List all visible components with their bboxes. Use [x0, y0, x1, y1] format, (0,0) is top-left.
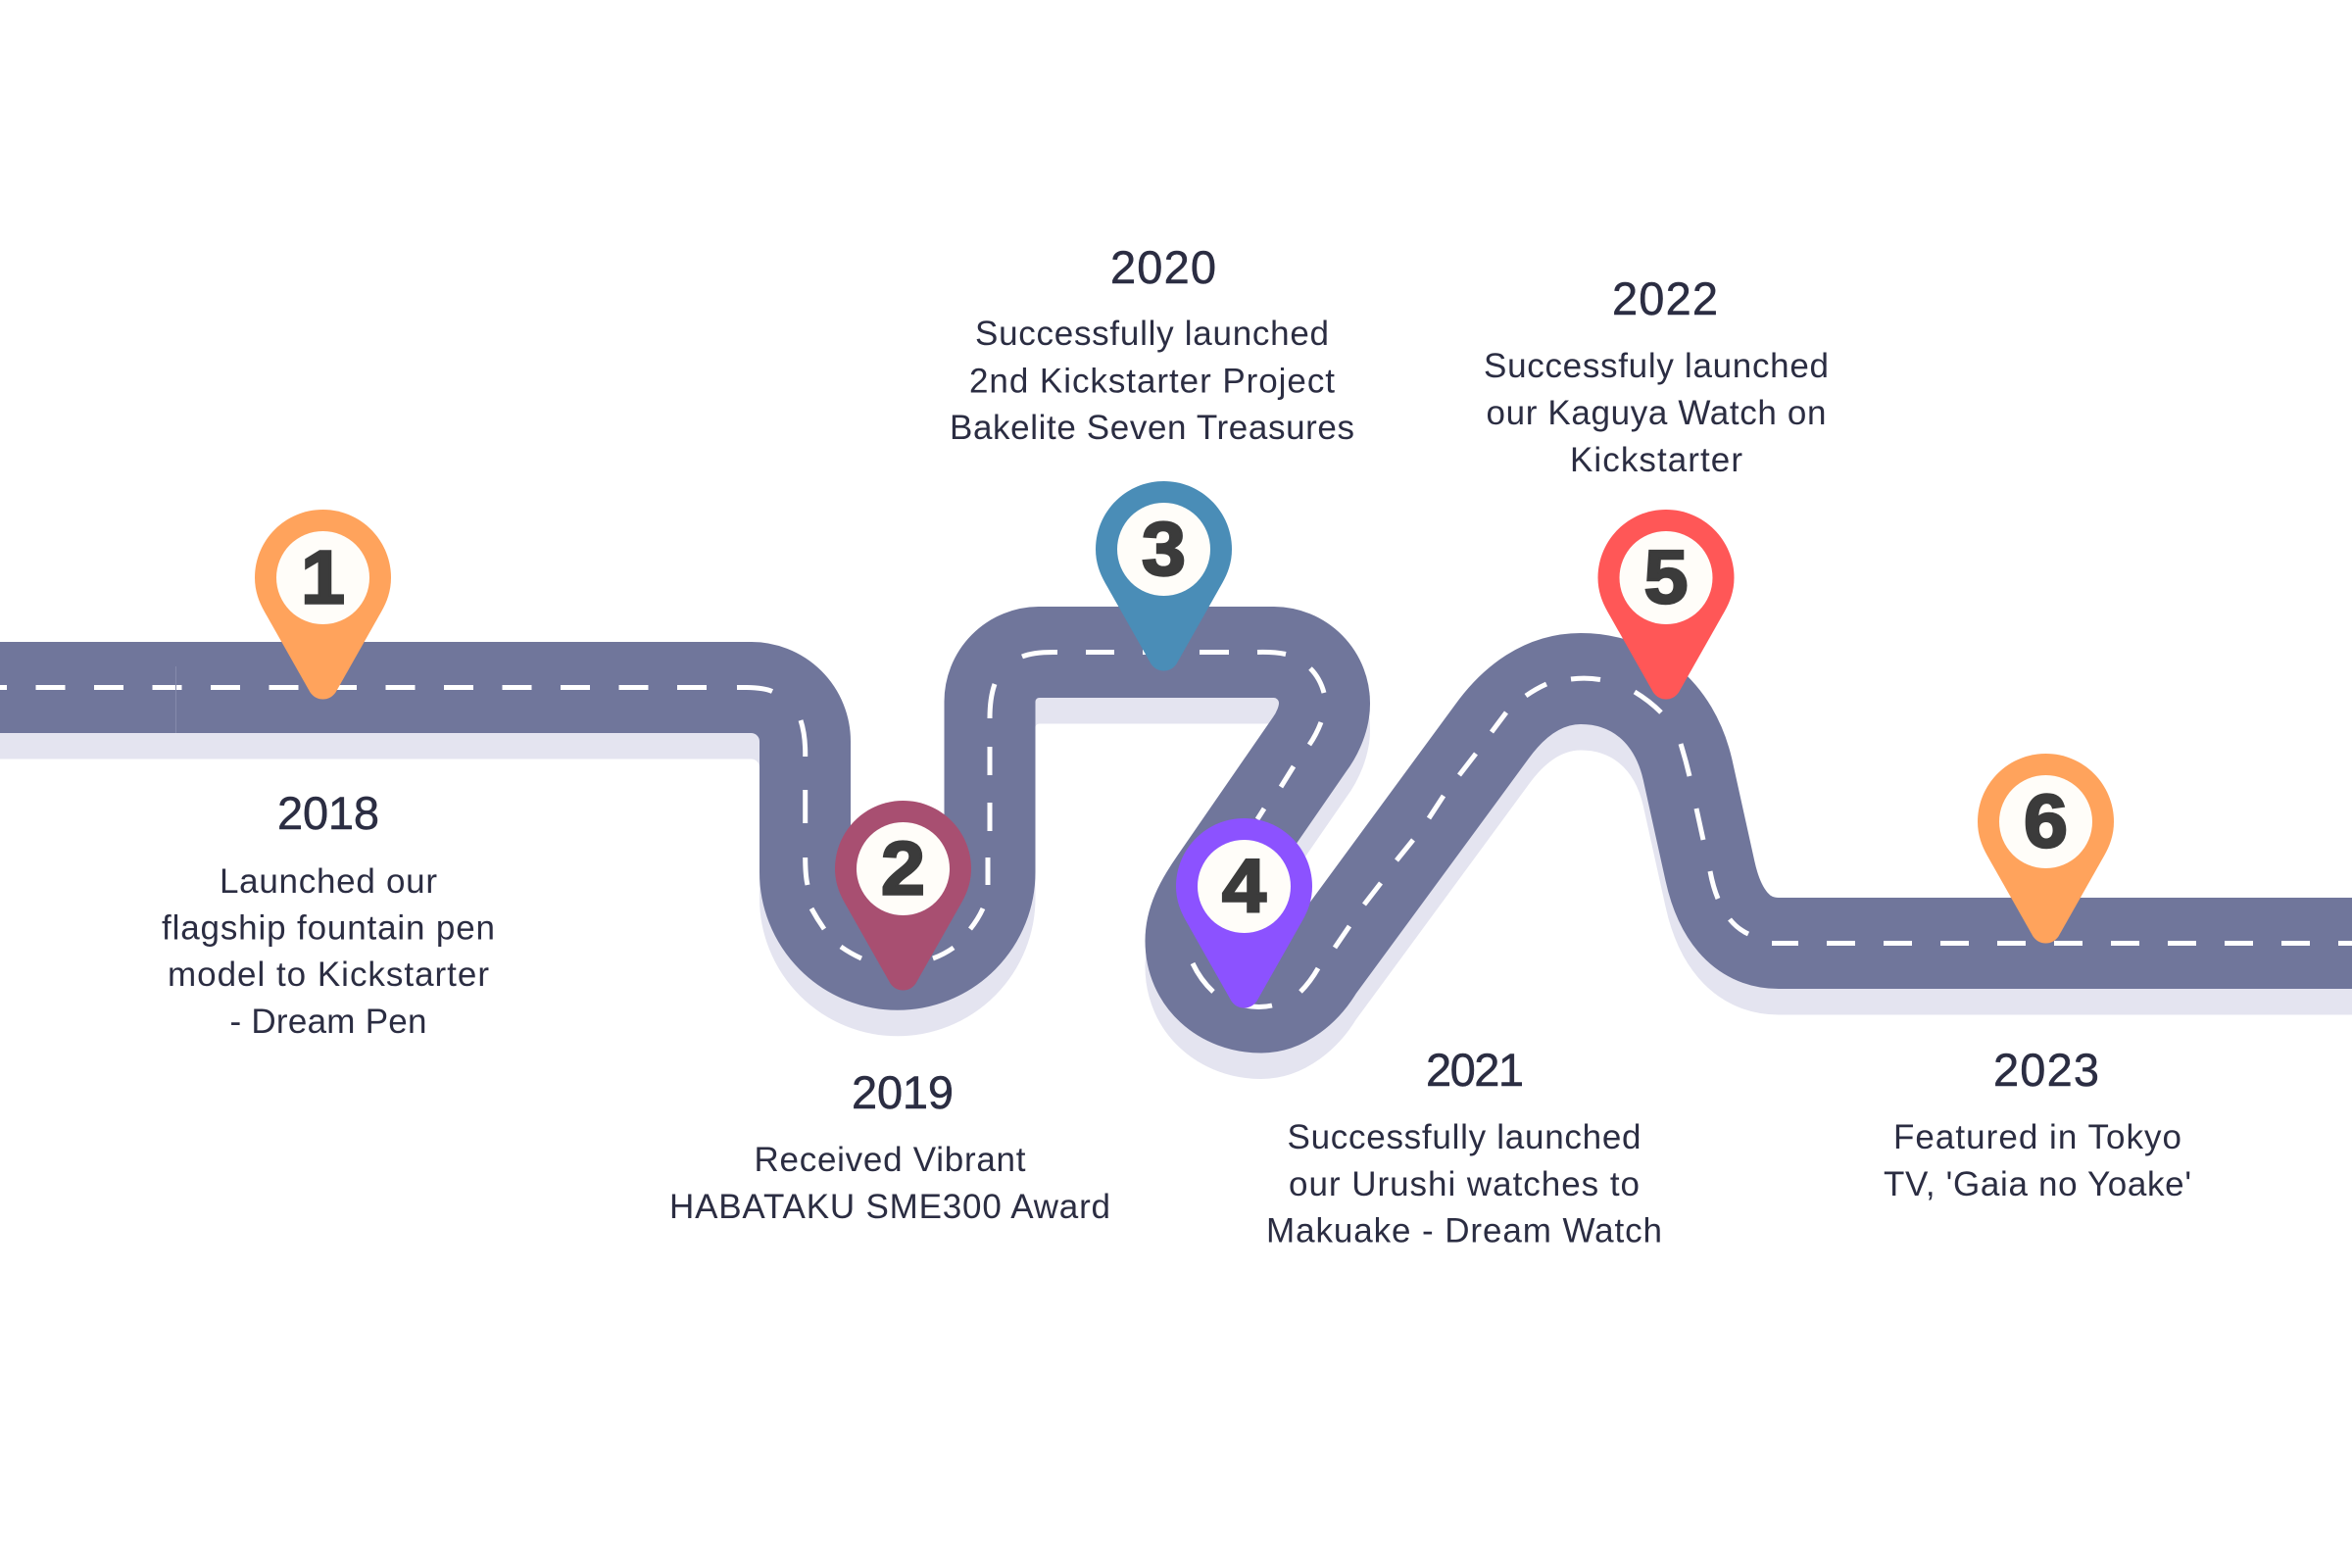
description 2018: flagship fountain pen	[162, 909, 495, 947]
description 2019: Received Vibrant	[755, 1141, 1026, 1179]
description 2018	[162, 862, 495, 1041]
description 2019	[669, 1141, 1110, 1226]
year 2020: 2020	[1110, 241, 1216, 293]
pin 2: 2	[881, 826, 925, 910]
milestone 6: 2023	[1884, 754, 2191, 1203]
description 2020: Bakelite Seven Treasures	[950, 409, 1354, 447]
description 2023: TV, 'Gaia no Yoake'	[1884, 1165, 2191, 1203]
pin 5: 5	[1644, 535, 1688, 619]
description 2018: model to Kickstarter	[168, 956, 489, 994]
pin 2	[835, 801, 971, 990]
description 2021: Makuake - Dream Watch	[1266, 1211, 1662, 1250]
year 2023: 2023	[1993, 1044, 2099, 1096]
pin 6	[1978, 754, 2114, 943]
road shadow	[0, 678, 2352, 1033]
road center dashes	[0, 652, 2352, 1007]
description 2018: - Dream Pen	[229, 1003, 427, 1041]
description 2022: our Kaguya Watch on	[1486, 394, 1827, 432]
year 2021: 2021	[1426, 1044, 1524, 1096]
milestone 2: 2019	[669, 801, 1110, 1226]
description 2021: Successfully launched	[1288, 1118, 1641, 1156]
milestone 3: 2020	[950, 241, 1354, 670]
description 2020: Successfully launched	[975, 315, 1329, 353]
pin 1: 1	[301, 535, 345, 619]
milestone 4: 2021	[1176, 818, 1662, 1250]
year 2022: 2022	[1612, 272, 1718, 324]
pin 1	[255, 510, 391, 700]
year 2019: 2019	[852, 1066, 954, 1118]
pin 5	[1597, 510, 1735, 700]
milestone 1: 2018	[162, 510, 495, 1041]
winding road	[0, 652, 2352, 1033]
description 2022: Kickstarter	[1570, 441, 1742, 479]
description 2020	[950, 315, 1354, 447]
year 2018: 2018	[277, 787, 379, 839]
description 2022: Successfuly launched	[1484, 347, 1829, 385]
description 2018: Launched our	[220, 862, 437, 901]
pin 4	[1176, 818, 1312, 1007]
road surface	[0, 653, 2352, 1007]
pin 6: 6	[2024, 779, 2068, 863]
description 2023	[1884, 1118, 2191, 1203]
pin 4: 4	[1222, 844, 1266, 928]
milestone 5: 2022	[1484, 272, 1829, 700]
pin 3	[1096, 481, 1232, 670]
description 2021: our Urushi watches to	[1289, 1165, 1640, 1203]
description 2020: 2nd Kickstarter Project	[969, 363, 1335, 400]
description 2019: HABATAKU SME300 Award	[669, 1188, 1110, 1226]
description 2022	[1484, 347, 1829, 479]
pin 3: 3	[1142, 507, 1186, 591]
description 2021	[1266, 1118, 1662, 1250]
description 2023: Featured in Tokyo	[1893, 1118, 2181, 1156]
